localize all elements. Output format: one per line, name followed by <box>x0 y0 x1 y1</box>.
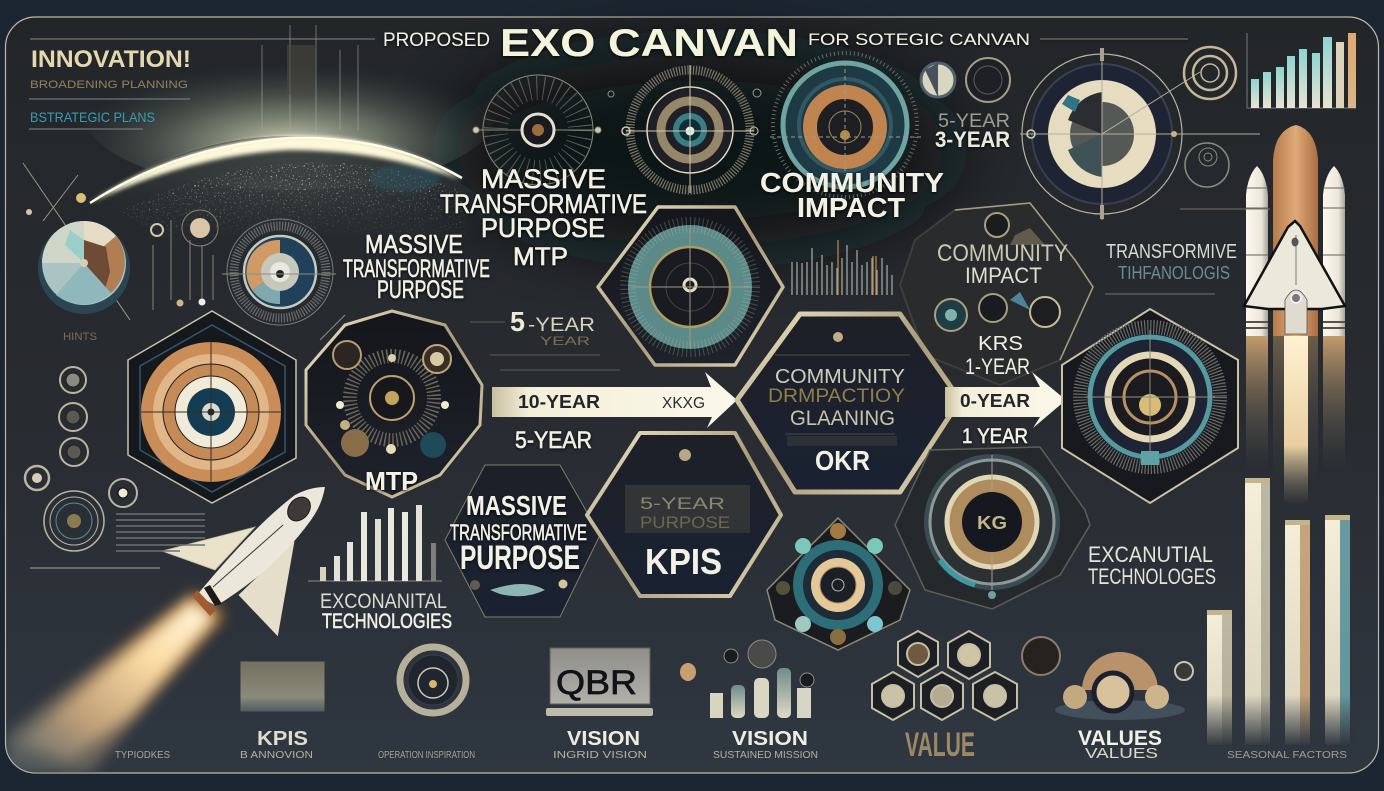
rocket: launch vehicle <box>1244 125 1345 505</box>
hero: planet horizon <box>89 25 486 238</box>
text: transformative technologies <box>1105 209 1270 294</box>
bar chart: exponential technologies <box>308 505 442 581</box>
text: massive transformative purpose mtp <box>440 164 647 271</box>
icon: qbr laptop <box>546 648 653 716</box>
hexagon: okr <box>737 314 960 492</box>
text: 5-year ghost <box>470 306 620 370</box>
label: vision: VISION <box>732 728 808 750</box>
text: community impact: COMMUNITY <box>937 240 1068 267</box>
label: kpis: KPIS <box>257 728 308 750</box>
text: massive transformative purpose mtp: PURPOSE <box>481 213 605 243</box>
rocket: flame and shuttle <box>5 487 325 773</box>
bars: tall columns <box>1200 478 1356 747</box>
label: qbr: QBR <box>556 664 637 702</box>
hexagon: mid teal dial <box>598 207 783 365</box>
text: massive transformative purpose (left) <box>343 229 490 304</box>
icon: small rings left <box>25 367 160 568</box>
plumes <box>1246 335 1345 505</box>
subheading: strategic plans: BSTRATEGIC PLANS <box>30 109 155 125</box>
text: exponential technologies right: TECHNOLOGES <box>1088 564 1216 589</box>
text: community: COMMUNITY <box>775 366 905 388</box>
text: 1 year: 1 YEAR <box>962 425 1028 448</box>
caption: seasonal factors: SEASONAL FACTORS <box>1227 750 1347 761</box>
bar chart: vision <box>680 640 818 761</box>
icon: gauges strip <box>151 210 218 310</box>
hexagon: right dial <box>1062 309 1238 503</box>
subheading: broadening planning: BROADENING PLANNING <box>30 79 188 91</box>
text: exponential technologies left <box>320 590 452 633</box>
label: vision: INGRID VISION <box>553 750 647 761</box>
icon: values semicircle <box>1055 652 1185 762</box>
text: massive transformative purpose mtp: MASSIVE <box>481 164 606 194</box>
label: okr: OKR <box>815 445 870 476</box>
icon: cream ring dial <box>1020 48 1260 220</box>
boosters <box>1246 166 1268 336</box>
text: exponential technologies left: TECHNOLOGIES <box>322 610 452 633</box>
text: 5-year 3-year: 3-YEAR <box>935 127 1010 152</box>
title <box>383 22 1188 65</box>
label: mtp: MTP <box>365 466 418 496</box>
icon: target dial <box>222 219 345 340</box>
panel: kpis image <box>240 661 325 761</box>
text: exponential technologies left: EXCONANITAL <box>320 590 447 613</box>
label: vision: VISION <box>567 728 640 750</box>
title: PROPOSED <box>383 30 490 51</box>
label: values small: VALUES <box>1085 745 1158 762</box>
label: hints: HINTS <box>63 331 97 343</box>
hexagon: community impact octagon: 1-YEAR <box>965 354 1030 379</box>
label: value: VALUE <box>905 726 975 764</box>
icon: radial dial <box>473 75 614 185</box>
hexagon: massive transformative purpose <box>445 465 600 617</box>
text: exponential technologies right <box>1088 542 1216 589</box>
hexagon: target icon <box>128 311 296 503</box>
text: exponential technologies right: EXCANUTIAL <box>1088 542 1213 567</box>
label: 0-year: 0-YEAR <box>960 391 1030 411</box>
hexagon: community impact octagon <box>900 203 1093 385</box>
bar chart: top right <box>1247 33 1356 108</box>
hexagon: kpis <box>587 433 781 596</box>
hexagon: teal gear <box>767 518 910 650</box>
text: 5-year: 5-YEAR <box>515 427 592 454</box>
icon: hex cluster <box>872 631 1017 720</box>
text: impact: DRMPACTIOY <box>768 386 905 407</box>
hexagon: lower right dial: KG <box>977 513 1007 533</box>
label: 10-year: 10-YEAR <box>518 392 600 412</box>
arrow: 0-year timeline <box>945 372 1066 428</box>
icon: small badge <box>1022 637 1193 680</box>
title: EXO CANVAN <box>500 22 798 65</box>
shuttle <box>1244 221 1345 309</box>
caption: SUSTAINED MISSION <box>713 750 818 761</box>
hexagon: mtp octagon <box>306 311 482 497</box>
text: transformative: TRANSFORMATIVE <box>450 520 587 545</box>
text: community impact: COMMUNITY <box>760 167 944 198</box>
text: 5-year ghost: YEAR <box>540 334 590 348</box>
text: massive transformative purpose (left): PURPOSE <box>377 276 464 304</box>
label: xkxg: XKXG <box>662 395 705 412</box>
text: transformative technologies: TIHFANOLOGIS <box>1118 263 1230 283</box>
dark centre shading <box>450 55 950 245</box>
icon: spiral target <box>1184 47 1236 99</box>
text: 5-year 3-year: 5-YEAR <box>938 111 1010 132</box>
text: massive transformative purpose mtp: TRANSFORMATIVE <box>440 189 647 219</box>
text: massive transformative purpose (left): MASSIVE <box>365 229 463 259</box>
text: 5-year 3-year <box>935 111 1010 152</box>
text lines block <box>116 514 205 551</box>
icon: bottom gauge <box>378 647 475 761</box>
text: glaaning: GLAANING <box>790 407 895 430</box>
icon: small spiral <box>1185 143 1229 187</box>
icon: teal and orange dial <box>770 53 922 197</box>
heading: innovation: INNOVATION! <box>31 46 191 73</box>
text: massive transformative purpose (left): TRANSFORMATIVE <box>343 255 490 283</box>
icon: pie chart <box>23 163 130 343</box>
label: kpis: KPIS <box>645 541 722 582</box>
header text: innovation <box>29 39 375 129</box>
text: community impact: IMPACT <box>797 192 905 223</box>
caption: OPERATION INSPIRATION <box>378 750 475 761</box>
hexagon: community impact octagon: IMPACT <box>965 263 1042 288</box>
text: krs 1-year: KRS <box>978 333 1023 355</box>
text: 5-year ghost: 5 <box>510 306 525 337</box>
text: ghost 5-year: 5-YEAR <box>640 494 725 513</box>
label: vision <box>553 728 647 761</box>
text: transformative technologies: TRANSFORMIVE <box>1106 241 1237 263</box>
text: purpose: PURPOSE <box>460 539 580 577</box>
chart: waveform <box>792 240 892 295</box>
caption: B ANNOVION <box>240 750 313 761</box>
main tank <box>1273 125 1318 336</box>
caption: typiodkes: TYPIODKES <box>115 750 170 761</box>
label: values: VALUES <box>1078 727 1162 750</box>
text: ghost purpose: PURPOSE <box>640 513 730 532</box>
text: massive transformative purpose mtp: MTP <box>513 243 568 271</box>
icon: mini dials <box>921 58 1010 102</box>
hexagon: lower right dial <box>895 447 1090 609</box>
text: 5-year ghost: -YEAR <box>528 315 595 336</box>
arrow: 10-year timeline <box>492 372 737 428</box>
icon: teal core dial <box>622 65 761 193</box>
text: massive: MASSIVE <box>466 490 567 521</box>
text: community impact <box>760 167 944 223</box>
title: FOR SOTEGIC CANVAN <box>808 30 1030 49</box>
